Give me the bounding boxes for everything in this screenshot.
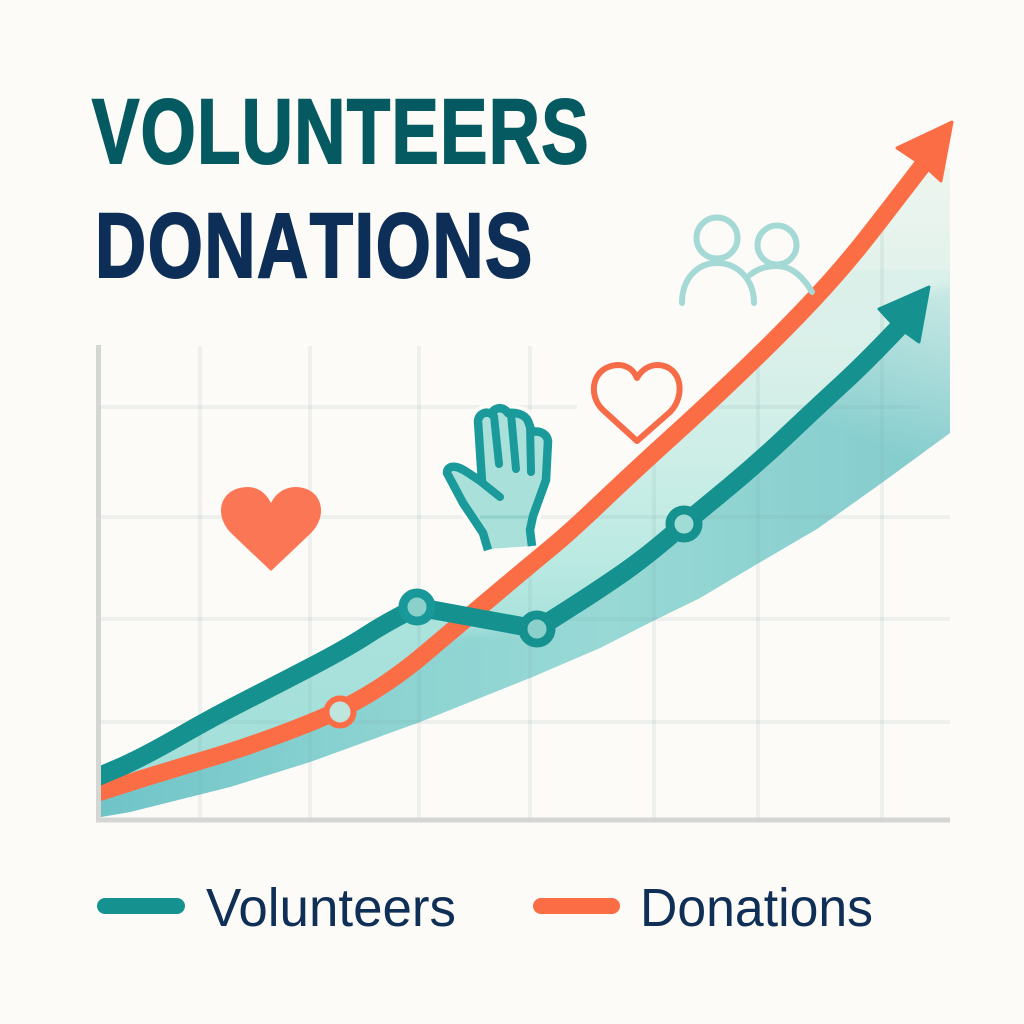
legend: donations: Donations [640, 878, 873, 938]
title: VOLUNTEERS [92, 81, 590, 183]
title [92, 81, 590, 297]
icon: people [682, 218, 812, 303]
axes [98, 345, 950, 820]
title: DONATIONS [95, 195, 534, 297]
volunteers line [88, 287, 929, 781]
icon: filled heart [221, 487, 321, 571]
chart [96, 120, 954, 822]
icon: outlined heart [594, 365, 680, 441]
legend [105, 878, 873, 938]
shaded area [101, 167, 950, 817]
legend: volunteers: Volunteers [206, 878, 456, 938]
icon: raised hand [447, 408, 548, 550]
grid lines [100, 210, 950, 818]
donations line [88, 122, 952, 796]
